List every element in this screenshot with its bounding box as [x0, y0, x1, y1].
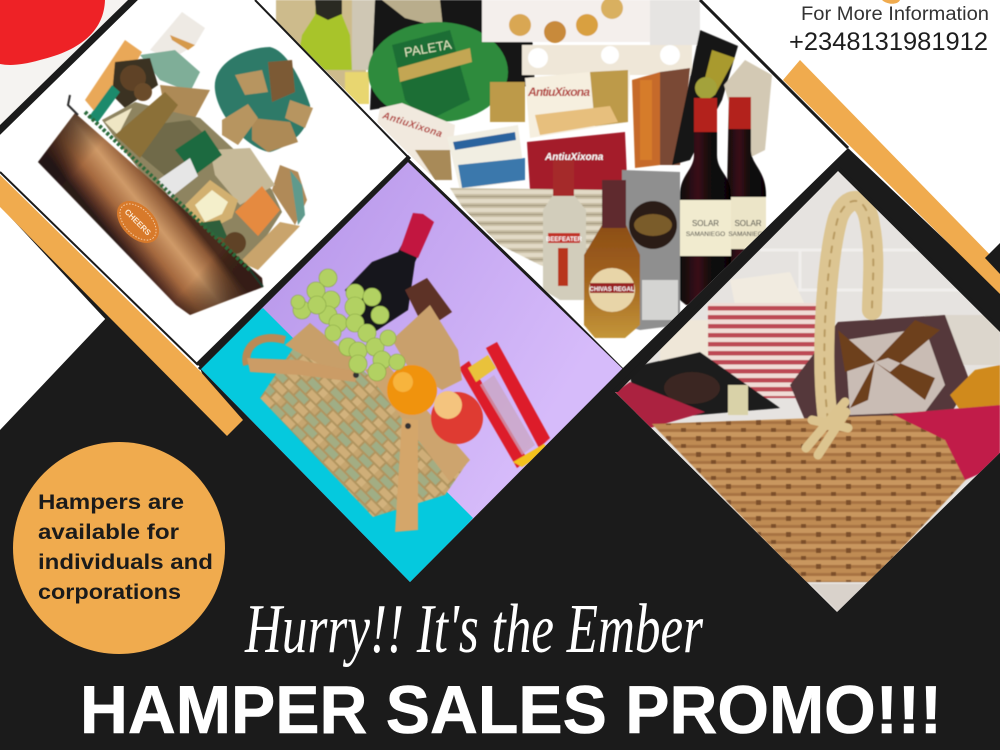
callout: orange circle: available for	[38, 521, 179, 544]
orange diagonal strip right	[783, 60, 1000, 294]
tin body	[38, 95, 263, 315]
wine bottle	[345, 213, 434, 335]
nougat boxes: AntiuXixona	[380, 110, 444, 140]
orange foil	[950, 365, 1000, 410]
callout: orange circle: corporations	[38, 581, 181, 604]
dark box left	[628, 352, 780, 420]
label: cheers oval: CHEERS	[123, 207, 153, 238]
wicker basket	[450, 188, 640, 300]
contact text: +2348131981912	[789, 28, 988, 56]
gift items	[88, 85, 300, 270]
top-left black diagonal strip	[0, 0, 138, 135]
wine bottles: SAMANIEGO	[686, 231, 725, 238]
green round tin: PALETA	[403, 37, 453, 60]
bow ribbon	[160, 47, 313, 225]
gin bottle: BEEFEATER	[546, 237, 583, 243]
red box	[527, 132, 627, 195]
gin bottle	[543, 160, 586, 300]
callout: orange circle: individuals and	[38, 551, 213, 574]
panel: metal tin hamper	[0, 0, 314, 316]
clear bag and card behind the tin	[85, 12, 205, 118]
panel: picnic basket with wine and fruit	[201, 162, 622, 582]
contact text	[789, 4, 989, 56]
contact text: For More Information	[801, 4, 989, 25]
jar and shelf items at right	[925, 315, 1000, 365]
orange diagonal strip left	[0, 175, 243, 436]
red rattle toy	[459, 342, 550, 468]
blue cheese packet	[447, 125, 525, 190]
dark wrapping and sack	[352, 0, 535, 110]
fruit: orange and apple	[387, 365, 483, 444]
wine bottles: SAMANIEGO	[728, 231, 768, 238]
wine bottles: SOLAR	[734, 219, 762, 228]
woven basket	[246, 323, 470, 532]
chivas box	[622, 170, 680, 330]
green champagne bottle	[276, 0, 369, 104]
back envelope and striped gift box	[660, 272, 825, 398]
wall bricks	[760, 209, 958, 292]
panel outline: wicker basket top edges	[611, 165, 1000, 392]
basket foot shadow	[810, 584, 866, 612]
red box: AntiuXixona	[544, 152, 604, 163]
right edge black corner	[985, 243, 1000, 274]
whisky bottle	[584, 180, 640, 338]
brown ribbon box	[790, 315, 970, 420]
grapes	[291, 269, 405, 381]
black package and bag	[672, 30, 772, 165]
basket handle	[806, 201, 873, 455]
script heading: Hurry!! It's the Ember	[244, 591, 704, 668]
label: cheers oval	[117, 201, 159, 243]
cookie boxes	[482, 0, 700, 75]
main title: HAMPER SALES PROMO!!!	[80, 672, 942, 748]
cured sausages	[632, 68, 690, 168]
wicker basket body	[652, 412, 980, 582]
pink tissue right	[892, 405, 1000, 480]
panel outline: picnic basket upper edges	[199, 160, 624, 369]
chocolate bar	[404, 278, 452, 321]
wine bottles	[680, 97, 768, 305]
green round tin	[368, 22, 508, 122]
top-left corner with red cloth	[0, 0, 135, 130]
callout: orange circle: Hampers are	[38, 491, 184, 514]
pink tissue left	[615, 382, 705, 428]
callout: orange circle	[13, 442, 225, 654]
nougat boxes: AntiuXixona	[527, 85, 590, 99]
panel outline: tin hamper edges	[0, 155, 411, 367]
panel: food and wine hamper	[250, 0, 860, 375]
cookies	[392, 305, 462, 390]
logo fragment	[882, 0, 900, 4]
nougat boxes	[375, 70, 630, 180]
panel outline: food hamper edges	[255, 0, 848, 157]
panel: wicker basket photo	[610, 160, 1000, 620]
whisky bottle: CHIVAS REGAL	[590, 287, 635, 293]
wine bottles: SOLAR	[692, 219, 719, 228]
